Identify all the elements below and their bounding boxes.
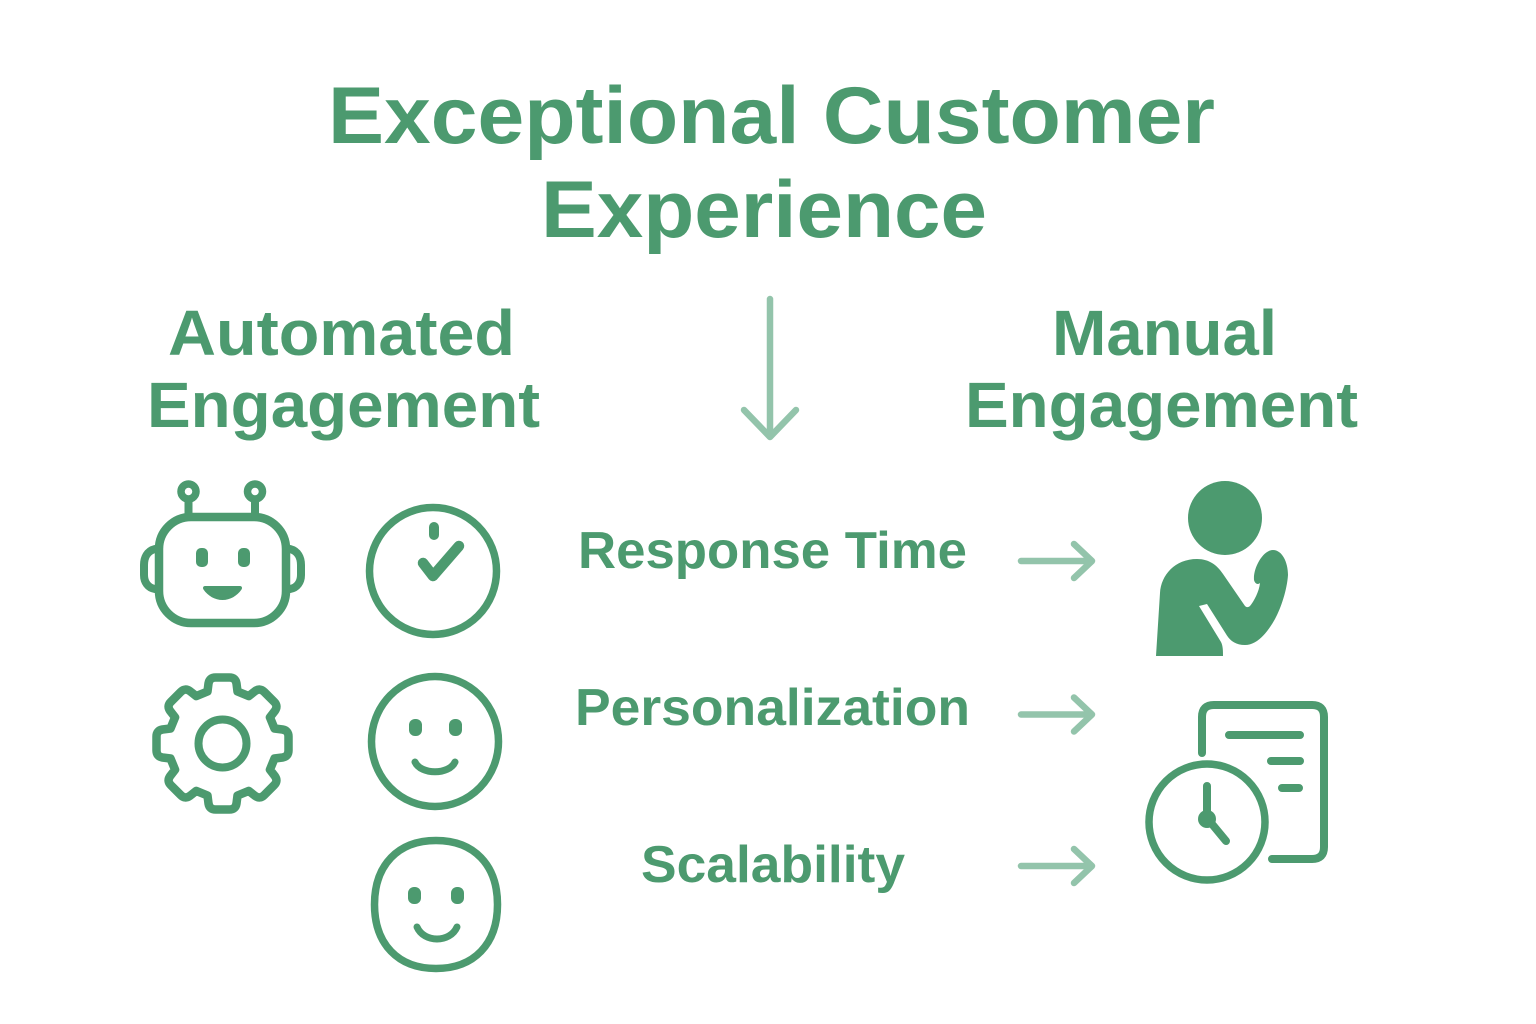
icon: document with clock — [1149, 705, 1324, 880]
title: Exceptional Customer — [328, 71, 1215, 161]
heading: manual engagement — [965, 297, 1358, 441]
icon: person — [1156, 481, 1288, 656]
arrow: personalization — [1021, 698, 1092, 732]
arrow: response time — [1021, 544, 1092, 578]
arrow: scalability — [1021, 849, 1092, 883]
label: response time: Response Time — [578, 522, 967, 580]
label: personalization: Personalization — [575, 679, 970, 737]
title: Experience — [541, 165, 987, 255]
icon: smiley one — [372, 676, 498, 806]
heading: manual engagement: Engagement — [965, 369, 1358, 441]
label: scalability: Scalability — [641, 836, 905, 894]
heading: automated engagement: Automated — [168, 297, 515, 369]
icon: smiley two — [374, 840, 498, 968]
icon: robot — [144, 484, 301, 623]
heading: automated engagement: Engagement — [147, 369, 540, 441]
icon: clock with check — [370, 508, 496, 634]
heading: manual engagement: Manual — [1052, 297, 1277, 369]
heading: automated engagement — [147, 297, 540, 441]
title — [328, 71, 1215, 255]
icon: gear — [156, 678, 288, 810]
arrow: down from title — [744, 299, 796, 437]
